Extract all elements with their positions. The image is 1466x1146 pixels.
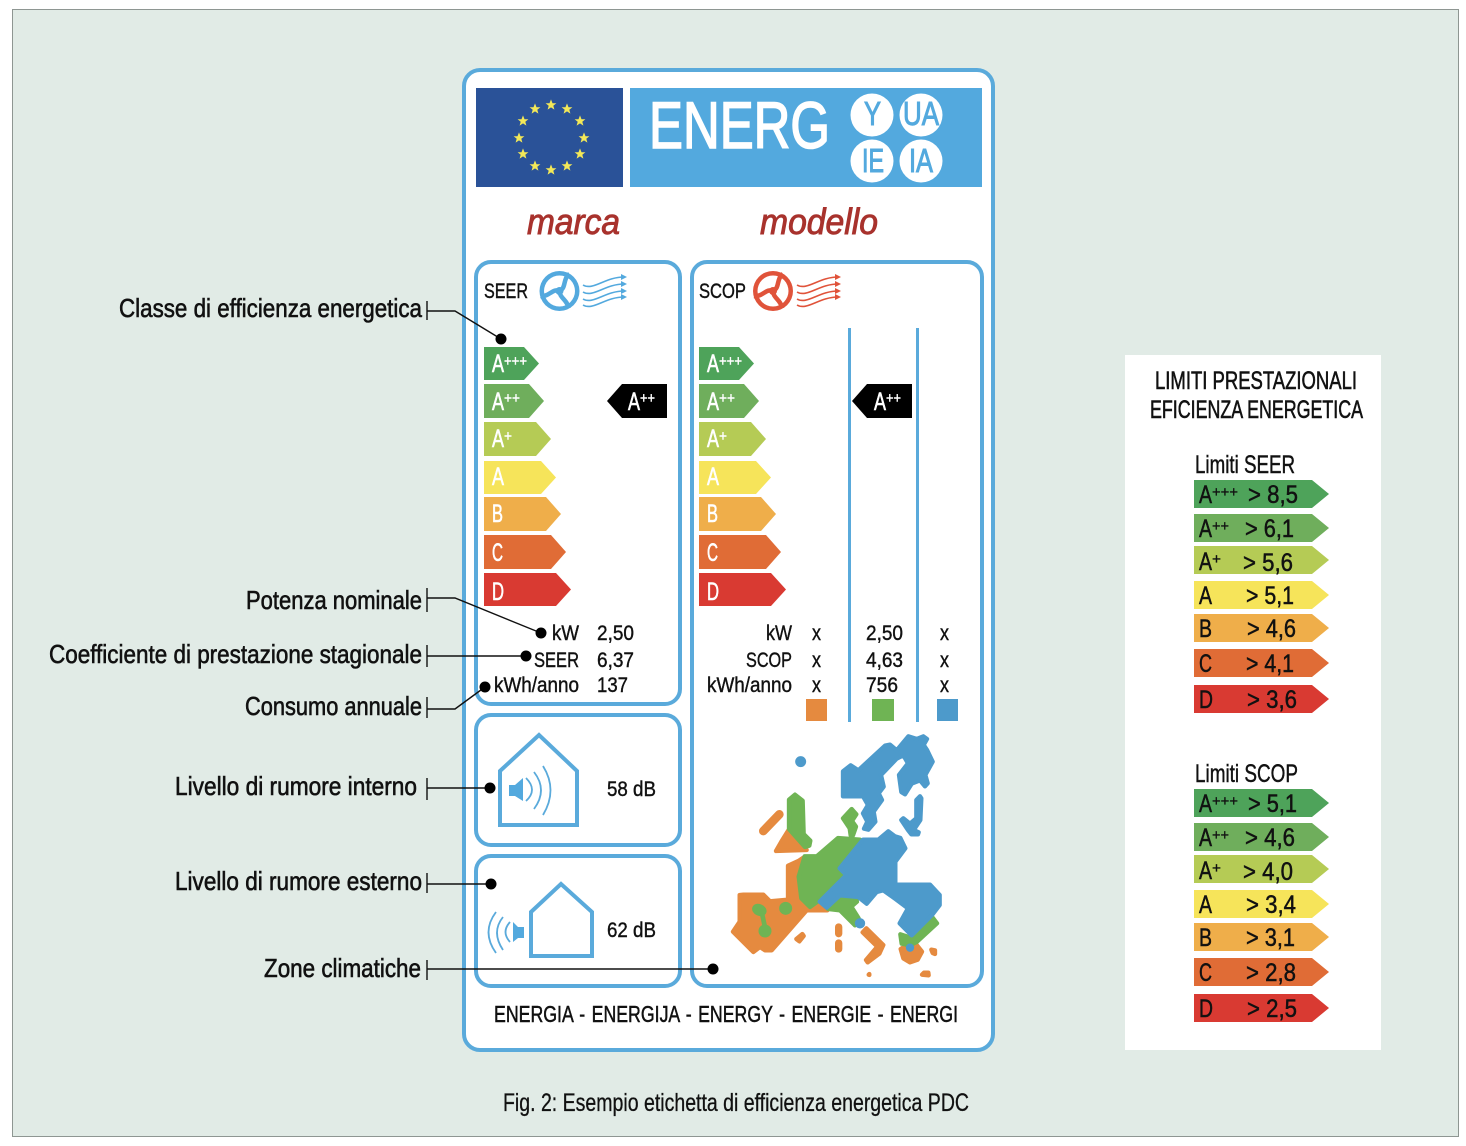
efficiency scale: A: [707, 463, 719, 491]
SEER limits: [1194, 451, 1329, 714]
icon: EU flag: [476, 88, 623, 187]
SEER limits: > 4,1: [1246, 650, 1294, 678]
SEER limits: > 4,6: [1247, 615, 1296, 643]
SEER limits: Limiti SEER: [1195, 451, 1295, 479]
SCOP data table: x: [812, 674, 821, 697]
rating tag A++: [852, 384, 912, 418]
SCOP limits: B: [1199, 924, 1212, 952]
SCOP data table: SCOP: [746, 649, 792, 672]
efficiency scale: D: [492, 578, 504, 606]
header: ENERG banner: IA: [909, 142, 933, 179]
SCOP data table: x: [940, 674, 949, 697]
callout: nominal power: Potenza nominale: [246, 585, 422, 615]
efficiency scale: A: [492, 388, 504, 416]
SCOP limits: > 4,0: [1243, 858, 1293, 886]
SCOP limits: Limiti SCOP: [1195, 760, 1298, 788]
efficiency scale: A: [492, 463, 504, 491]
SEER data: SEER: [534, 649, 579, 672]
panel: performance limits: [1125, 355, 1381, 1050]
SEER limits: C: [1199, 650, 1212, 678]
panel: SCOP heating: [692, 262, 982, 986]
SCOP limits: A: [1199, 891, 1212, 919]
SEER limits: > 5,6: [1243, 549, 1293, 577]
SCOP data table: 4,63: [866, 649, 903, 672]
callout: energy efficiency class: [119, 293, 506, 344]
callout: outdoor noise: Livello di rumore esterno: [175, 866, 422, 896]
SCOP limits: +: [1212, 860, 1221, 877]
callout: climate zones: [264, 953, 718, 983]
callout: annual consumption: Consumo annuale: [245, 691, 422, 721]
SCOP data table: kWh/anno: [707, 674, 792, 697]
SCOP limits: D: [1199, 995, 1213, 1023]
efficiency scale: C: [707, 539, 718, 567]
SEER data: kWh/anno: [494, 674, 579, 697]
SEER limits: > 5,1: [1246, 582, 1294, 610]
efficiency scale: C: [492, 539, 503, 567]
callout: nominal power: [246, 585, 546, 638]
panel title: [1150, 367, 1363, 424]
efficiency scale: A: [707, 425, 719, 453]
SCOP data table: x: [812, 649, 821, 672]
header: ENERG banner: IE: [862, 142, 884, 179]
SEER data: 2,50: [597, 622, 634, 645]
SCOP data table: x: [940, 649, 949, 672]
SCOP limits: > 3,1: [1246, 924, 1295, 952]
efficiency scale: B: [707, 500, 718, 528]
brand placeholder: marca: [527, 201, 620, 242]
SCOP limits: [1194, 760, 1329, 1023]
SCOP data table: 2,50: [866, 622, 903, 645]
efficiency scale: +++: [719, 353, 742, 370]
SCOP data table: kW: [766, 622, 792, 645]
SEER limits: ++: [1212, 518, 1229, 535]
header: ENERG banner: ENERG: [649, 88, 830, 162]
SCOP limits: ++: [1212, 827, 1229, 844]
SCOP data table: 756: [866, 674, 898, 697]
rating tag A++: A: [628, 388, 640, 416]
SCOP limits: > 2,5: [1247, 995, 1297, 1023]
efficiency scale: +: [719, 428, 727, 445]
SEER limits: +: [1212, 551, 1221, 568]
SCOP limits: > 4,6: [1245, 824, 1295, 852]
efficiency scale: A: [492, 350, 504, 378]
SCOP data table: [707, 622, 958, 721]
panel: indoor noise: 58 dB: [607, 778, 656, 801]
SCOP limits: > 2,8: [1246, 959, 1296, 987]
figure caption: Fig. 2: Esempio etichetta di efficienza energetica PDC: [503, 1089, 969, 1117]
SEER limits: A: [1199, 481, 1212, 509]
climate zones map of Europe: [733, 736, 940, 975]
callout: climate zones: Zone climatiche: [264, 953, 421, 983]
header: ENERG banner: [630, 88, 982, 187]
efficiency scale: +: [504, 428, 512, 445]
SEER limits: A: [1199, 548, 1212, 576]
SEER limits: > 3,6: [1247, 686, 1297, 714]
SEER data: 6,37: [597, 649, 634, 672]
panel: SEER cooling: [476, 262, 680, 704]
SEER limits: B: [1199, 615, 1212, 643]
footer languages: ENERGIA - ENERGIJA - ENERGY - ENERGIE - ENERGI: [494, 1001, 958, 1027]
SCOP limits: A: [1199, 857, 1212, 885]
panel: outdoor noise: 62 dB: [607, 919, 656, 942]
efficiency scale: A: [707, 350, 719, 378]
SCOP limits: > 5,1: [1248, 790, 1297, 818]
panel: indoor noise: [476, 715, 680, 845]
header: ENERG banner: Y: [864, 95, 881, 132]
efficiency scale: B: [492, 500, 503, 528]
SEER limits: D: [1199, 686, 1213, 714]
SCOP data table: x: [940, 622, 949, 645]
callout: seasonal performance coefficient: Coefficiente di prestazione stagionale: [49, 639, 422, 669]
SEER data: kW: [552, 622, 579, 645]
SCOP limits: > 3,4: [1246, 891, 1296, 919]
panel title: EFICIENZA ENERGETICA: [1150, 396, 1363, 424]
icon: heating fan: [753, 271, 841, 311]
rating tag A++: A: [874, 388, 886, 416]
SEER limits: > 6,1: [1245, 515, 1294, 543]
rating tag A++: ++: [886, 390, 901, 407]
SCOP limits: A: [1199, 824, 1212, 852]
efficiency scale: [699, 347, 786, 606]
SCOP data table: x: [812, 622, 821, 645]
efficiency scale: D: [707, 578, 719, 606]
model placeholder: modello: [760, 201, 878, 242]
SCOP limits: A: [1199, 790, 1212, 818]
panel: SEER cooling: SEER: [484, 280, 528, 303]
SEER limits: +++: [1212, 484, 1238, 501]
rating tag A++: [607, 384, 667, 418]
efficiency scale: +++: [504, 353, 527, 370]
callout: annual consumption: [245, 682, 490, 721]
SEER limits: A: [1199, 515, 1212, 543]
SEER data: [494, 622, 634, 697]
rating tag A++: ++: [640, 390, 655, 407]
icon: house with indoor speaker: [500, 735, 577, 825]
SCOP limits: +++: [1212, 793, 1238, 810]
header: ENERG banner: UA: [903, 95, 939, 132]
callout: indoor noise: Livello di rumore interno: [175, 771, 417, 801]
efficiency scale: [484, 347, 571, 606]
panel: SCOP heating: SCOP: [699, 280, 746, 303]
efficiency scale: ++: [719, 390, 735, 407]
icon: house with outdoor speaker: [488, 884, 592, 956]
SCOP limits: C: [1199, 959, 1212, 987]
efficiency scale: A: [707, 388, 719, 416]
SEER limits: A: [1199, 582, 1212, 610]
efficiency scale: ++: [504, 390, 520, 407]
SEER limits: > 8,5: [1248, 481, 1298, 509]
icon: cooling fan: [540, 271, 627, 311]
efficiency scale: A: [492, 425, 504, 453]
panel: outdoor noise: [476, 856, 680, 986]
panel title: LIMITI PRESTAZIONALI: [1155, 367, 1357, 395]
callout: energy efficiency class: Classe di efficienza energetica: [119, 293, 422, 323]
SEER data: 137: [597, 674, 628, 697]
